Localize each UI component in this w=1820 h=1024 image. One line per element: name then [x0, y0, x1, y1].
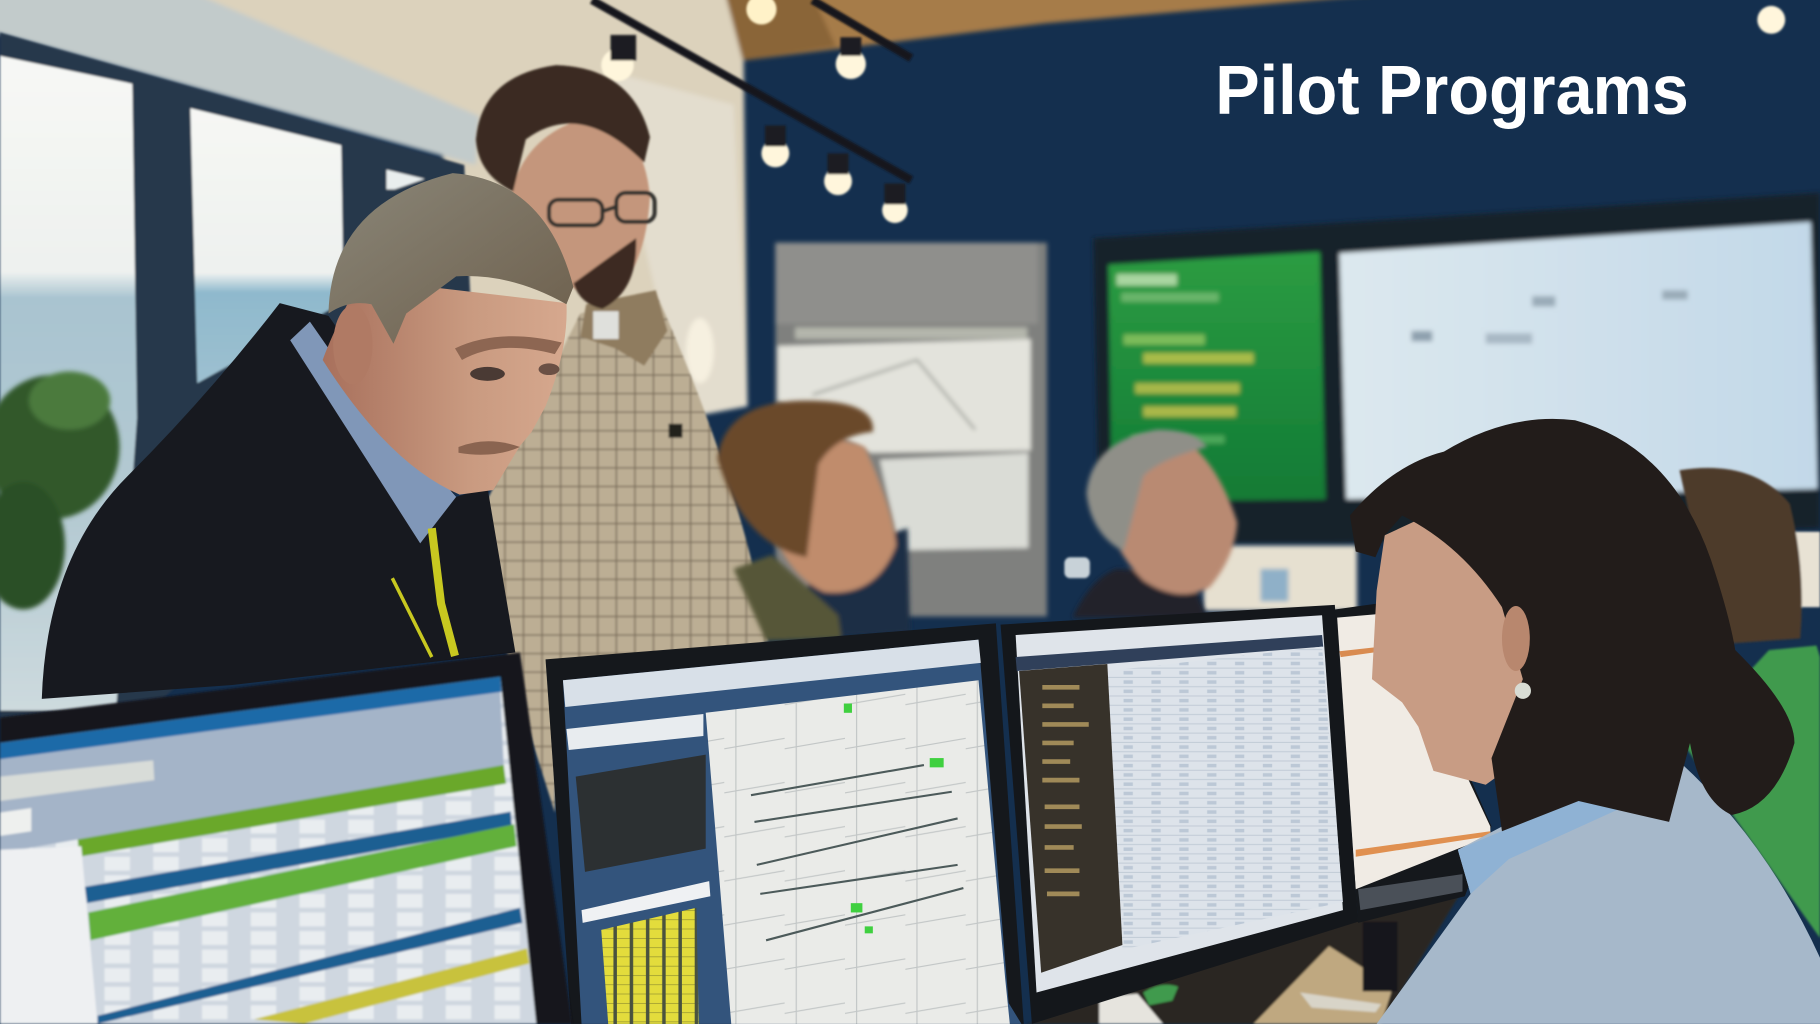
- desktop monitor: data table: [1001, 605, 1358, 1024]
- desk area below monitors: [1027, 871, 1474, 1024]
- wall switch: [1064, 557, 1090, 578]
- track lights: [592, 0, 1785, 223]
- person: man in plaid shirt standing: [476, 65, 768, 813]
- desktop monitor: far right partly hidden: [1335, 601, 1492, 923]
- person: man in black jacket with lanyard: [42, 173, 573, 699]
- large wall monitor: green and light screens: [1093, 193, 1820, 543]
- desktop monitor: schedule chart: [546, 623, 1024, 1024]
- title: Pilot Programs: [1215, 51, 1689, 129]
- desktop monitor: spreadsheet: [0, 652, 572, 1024]
- wall board with charts: [775, 243, 1047, 616]
- person: woman with dark hair in foreground: [1350, 419, 1820, 1024]
- person: man in green shirt at far right: [1680, 468, 1820, 938]
- background: left wall, ceiling band and wood ceiling: [0, 0, 1381, 424]
- person: man at centre-right background: [1072, 430, 1237, 618]
- plant: [0, 372, 120, 610]
- windows: [0, 33, 476, 720]
- person: man in centre background: [717, 401, 910, 641]
- desk box behind right man: [1204, 546, 1357, 611]
